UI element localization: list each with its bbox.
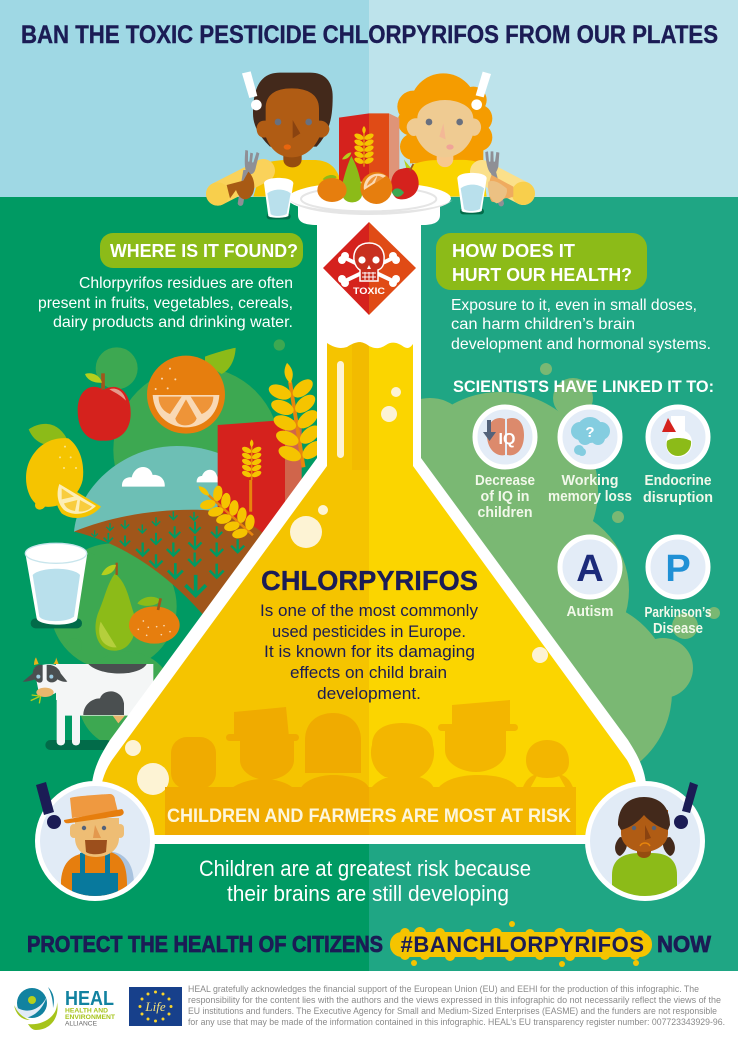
hill sky: [74, 446, 277, 547]
flask description: [260, 602, 479, 703]
call to action: NOW: [657, 931, 712, 957]
icon: parkinson's disease: [648, 537, 708, 597]
glass left: [264, 178, 293, 219]
shirt: [253, 160, 340, 197]
wheat diagonal: [188, 474, 264, 547]
fork: [238, 150, 259, 206]
right exclamation mark: [471, 72, 491, 110]
labels: linked conditions: Disease: [653, 621, 703, 637]
call to action: PROTECT THE HEALTH OF CITIZENS: [27, 931, 383, 957]
orange slice fruit: [147, 348, 236, 434]
orange slice on plate: [360, 172, 392, 204]
heading: how does it hurt our health: HURT OUR HEALTH?: [452, 264, 632, 285]
text: where is it found: dairy products and drinking water.: [53, 314, 293, 331]
clouds: [122, 467, 220, 487]
text: how does it hurt: can harm children’s brain: [451, 316, 635, 333]
logo: HEAL: [14, 987, 115, 1030]
farmer portrait: [35, 781, 155, 901]
neck shade: [352, 342, 369, 470]
logo: HEAL: HEALTH AND: [65, 1008, 108, 1014]
icon: working memory loss: ?: [585, 424, 595, 441]
icon: autism: [560, 537, 620, 597]
flask heading: CHLORPYRIFOS: [261, 565, 478, 596]
left child: [206, 73, 340, 206]
flask description: effects on child brain: [290, 664, 447, 682]
labels: linked conditions: Working: [562, 473, 618, 489]
right child: [397, 73, 535, 206]
flask description: It is known for its damaging: [264, 643, 475, 661]
heading: how does it hurt our health: [436, 233, 647, 290]
tangerine on plate: [317, 175, 347, 202]
text: children at greatest risk: [199, 856, 531, 906]
shirt: [412, 160, 487, 197]
glass of water: [25, 543, 87, 628]
logo: LIFE EU: Life: [144, 999, 166, 1014]
text: how does it hurt: Exposure to it, even in small doses,: [451, 297, 697, 314]
child figure: [615, 837, 675, 856]
flask description: Is one of the most commonly: [260, 602, 479, 620]
face: [257, 88, 329, 157]
footer acknowledgement text: HEAL gratefully acknowledges the financial support of the European Union (EU) and EEHI for the production of this infographic. The: [188, 984, 699, 995]
call to action: #BANCHLORPYRIFOS: [400, 932, 644, 957]
call to action: [27, 921, 712, 967]
glass right: [457, 173, 487, 214]
left background blobs: [40, 339, 285, 748]
banner text: children and farmers: CHILDREN AND FARMERS ARE MOST AT RISK: [167, 805, 571, 827]
crossbones: [345, 258, 393, 281]
face: [407, 100, 481, 157]
flask description: development.: [317, 685, 421, 703]
farmer figure: [66, 852, 134, 900]
wheat upper: [263, 359, 328, 471]
skull: [354, 243, 384, 281]
heading: where is it found: [100, 233, 303, 268]
labels: linked conditions: of IQ in: [480, 489, 530, 505]
logo: LIFE EU: [129, 987, 182, 1026]
text: where is it found: present in fruits, vegetables, cereals,: [38, 295, 293, 312]
labels: linked conditions: memory loss: [548, 489, 632, 505]
flask: [91, 220, 647, 844]
text: how does it hurt: development and hormonal systems.: [451, 336, 711, 353]
bubbles: [125, 361, 548, 795]
hashtag yellow blob: [390, 921, 652, 967]
logo: HEAL: ENVIRONMENT: [65, 1014, 115, 1021]
footer acknowledgement text: [188, 984, 725, 1028]
labels: linked conditions: children: [478, 505, 532, 521]
lemon: [26, 424, 101, 518]
icon: parkinson's disease: P: [665, 548, 691, 590]
silhouettes of children and farmers: [165, 700, 576, 835]
right background cloud blob: [388, 363, 720, 784]
labels: linked conditions: disruption: [643, 490, 713, 506]
apple on plate: [391, 159, 419, 199]
cereal box: [218, 420, 302, 553]
heading: how does it hurt our health: HOW DOES IT: [452, 240, 576, 261]
fork: [485, 151, 504, 206]
hand: [227, 172, 254, 199]
text: where is it found: [38, 275, 293, 331]
pear on plate: [341, 153, 362, 202]
hair: [253, 73, 333, 147]
labels: linked conditions: Decrease: [475, 473, 535, 489]
labels: linked conditions: Parkinson’s: [644, 605, 712, 621]
crop sprouts: [91, 511, 244, 595]
toxic diamond: [323, 222, 416, 315]
neck: [437, 150, 453, 167]
toxic label: TOXIC: [353, 286, 386, 296]
heading: scientists have linked it to: SCIENTISTS HAVE LINKED IT TO:: [453, 378, 714, 396]
labels: linked conditions: Endocrine: [644, 473, 712, 489]
field: [74, 510, 267, 615]
text: where is it found: Chlorpyrifos residues are often: [79, 275, 293, 292]
cow: [23, 657, 153, 750]
farmer exclamation mark: [36, 782, 61, 829]
tangerine: [129, 597, 180, 644]
left exclamation mark: [242, 71, 262, 110]
child portrait: [585, 781, 705, 901]
icon: working memory loss: [560, 407, 620, 467]
flask top lip: [298, 205, 440, 225]
plate: [288, 182, 453, 215]
child exclamation mark: [674, 782, 698, 829]
hair: [397, 73, 492, 163]
text: children at greatest risk: their brains are still developing: [227, 881, 509, 906]
icon: autism: A: [576, 548, 604, 590]
heading: where is it found: WHERE IS IT FOUND?: [110, 240, 298, 261]
neck: [283, 150, 302, 167]
text: children at greatest risk: Children are at greatest risk because: [199, 856, 531, 881]
icon: endocrine disruption: [648, 407, 708, 467]
arm: [218, 171, 263, 194]
pear: [95, 563, 135, 651]
labels: linked conditions: Autism: [566, 604, 614, 620]
children at the table with plate: [206, 71, 535, 219]
apple: [78, 373, 131, 441]
logo: HEAL: HEAL: [65, 988, 114, 1010]
liquid left: [100, 342, 369, 835]
icon: decrease of IQ: [475, 407, 535, 467]
flask description: used pesticides in Europe.: [272, 623, 466, 641]
left illustration: food and farm: [23, 339, 328, 750]
logo: HEAL: ALLIANCE: [65, 1020, 98, 1028]
arm: [482, 172, 523, 193]
labels: linked conditions: [475, 473, 713, 637]
footer acknowledgement text: responsibility for the content lies with the authors and the views expressed in this infographic do not necessarily reflect the views of the: [188, 995, 721, 1006]
icon: decrease of IQ: IQ: [499, 431, 515, 448]
hand: [489, 175, 513, 202]
cereal box on plate: [339, 113, 399, 183]
text: how does it hurt: [451, 297, 711, 353]
flask white outline: [91, 220, 647, 844]
liquid right: [369, 343, 638, 835]
